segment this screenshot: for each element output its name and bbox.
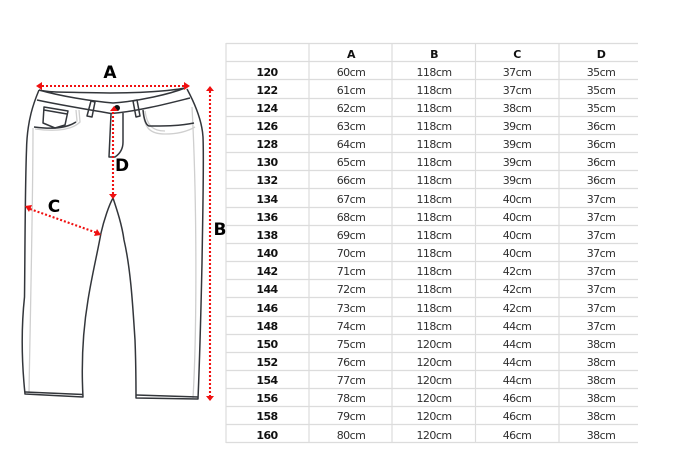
table rows: 126	[256, 120, 279, 133]
table rows: 75cm	[337, 338, 365, 351]
table rows: 69cm	[337, 229, 365, 242]
table rows: 158	[256, 410, 278, 423]
table rows: 36cm	[587, 156, 615, 169]
table rows: 67cm	[337, 193, 365, 206]
table rows: 35cm	[587, 102, 615, 115]
table rows: 120	[256, 66, 279, 79]
table rows: 66cm	[337, 174, 365, 187]
table rows: 144	[256, 283, 279, 296]
table rows: 37cm	[587, 229, 615, 242]
table rows: 118cm	[416, 174, 452, 187]
table rows: 130	[256, 156, 279, 169]
table rows: 118cm	[416, 320, 452, 333]
table rows: 46cm	[503, 429, 531, 442]
table rows: 38cm	[587, 429, 615, 442]
table rows: 118cm	[416, 156, 452, 169]
table rows: 44cm	[503, 320, 531, 333]
table rows: 70cm	[337, 247, 365, 260]
jeans diagram	[22, 63, 226, 401]
table rows: 62cm	[337, 102, 365, 115]
table rows: 37cm	[587, 302, 615, 315]
table header: B	[430, 48, 438, 61]
table rows: 120cm	[416, 410, 452, 423]
table rows: 118cm	[416, 247, 452, 260]
table rows: 146	[256, 302, 279, 315]
table rows: 44cm	[503, 356, 531, 369]
table rows: 40cm	[503, 211, 531, 224]
table rows: 122	[256, 84, 278, 97]
table rows: 76cm	[337, 356, 365, 369]
table rows: 39cm	[503, 156, 531, 169]
table rows: 118cm	[416, 66, 452, 79]
table rows	[256, 66, 615, 442]
table rows: 148	[256, 320, 278, 333]
label C: C	[48, 197, 60, 217]
table rows: 118cm	[416, 102, 452, 115]
table rows: 77cm	[337, 374, 365, 387]
table rows: 118cm	[416, 84, 452, 97]
table rows: 118cm	[416, 120, 452, 133]
table rows: 61cm	[337, 84, 365, 97]
label B: B	[214, 220, 226, 240]
table rows: 132	[256, 174, 278, 187]
table rows: 118cm	[416, 265, 452, 278]
table rows: 39cm	[503, 138, 531, 151]
table rows: 39cm	[503, 174, 531, 187]
table rows: 118cm	[416, 193, 452, 206]
arrow C	[25, 205, 101, 236]
table rows: 38cm	[587, 338, 615, 351]
table rows: 128	[256, 138, 278, 151]
table rows: 138	[256, 229, 278, 242]
table rows: 37cm	[503, 84, 531, 97]
table rows: 120cm	[416, 374, 452, 387]
table rows: 154	[256, 374, 279, 387]
table rows: 38cm	[587, 392, 615, 405]
table rows: 79cm	[337, 410, 365, 423]
table rows: 63cm	[337, 120, 365, 133]
table rows: 140	[256, 247, 279, 260]
table rows: 65cm	[337, 156, 365, 169]
table rows: 35cm	[587, 84, 615, 97]
table rows: 36cm	[587, 120, 615, 133]
table rows: 74cm	[337, 320, 365, 333]
table rows: 120cm	[416, 356, 452, 369]
arrow B	[206, 86, 214, 401]
table rows: 37cm	[587, 320, 615, 333]
table rows: 160	[256, 429, 279, 442]
table rows: 37cm	[503, 66, 531, 79]
table rows: 36cm	[587, 174, 615, 187]
table rows: 39cm	[503, 120, 531, 133]
table rows: 78cm	[337, 392, 365, 405]
table rows: 73cm	[337, 302, 365, 315]
table rows: 118cm	[416, 283, 452, 296]
table rows: 38cm	[587, 410, 615, 423]
table rows: 118cm	[416, 302, 452, 315]
icon: button	[114, 105, 120, 111]
table rows: 118cm	[416, 211, 452, 224]
label D: D	[115, 156, 129, 176]
table rows: 37cm	[587, 211, 615, 224]
table rows: 38cm	[587, 356, 615, 369]
table rows: 37cm	[587, 265, 615, 278]
table rows: 134	[256, 193, 279, 206]
table rows: 44cm	[503, 374, 531, 387]
table rows: 46cm	[503, 410, 531, 423]
table header: A	[347, 48, 356, 61]
table rows: 68cm	[337, 211, 365, 224]
table rows: 44cm	[503, 338, 531, 351]
size table	[226, 43, 638, 443]
table rows: 37cm	[587, 247, 615, 260]
table rows: 118cm	[416, 229, 452, 242]
table rows: 46cm	[503, 392, 531, 405]
jeans outline	[22, 88, 203, 399]
table rows: 124	[256, 102, 279, 115]
table rows: 150	[256, 338, 279, 351]
table rows: 142	[256, 265, 278, 278]
table rows: 60cm	[337, 66, 365, 79]
table rows: 80cm	[337, 429, 365, 442]
table rows: 42cm	[503, 302, 531, 315]
table rows: 120cm	[416, 392, 452, 405]
table rows: 38cm	[587, 374, 615, 387]
table rows: 36cm	[587, 138, 615, 151]
table rows: 38cm	[503, 102, 531, 115]
arrow A	[36, 82, 190, 90]
table rows: 72cm	[337, 283, 365, 296]
arrow D	[109, 106, 118, 199]
table rows: 40cm	[503, 193, 531, 206]
table rows: 35cm	[587, 66, 615, 79]
table rows: 37cm	[587, 193, 615, 206]
table header: D	[597, 48, 606, 61]
table rows: 118cm	[416, 138, 452, 151]
table rows: 136	[256, 211, 279, 224]
table rows: 71cm	[337, 265, 365, 278]
label A: A	[103, 63, 117, 83]
table rows: 152	[256, 356, 278, 369]
table grid	[226, 43, 638, 443]
table rows: 40cm	[503, 229, 531, 242]
table header: C	[513, 48, 521, 61]
table header	[347, 48, 606, 61]
table rows: 156	[256, 392, 279, 405]
table rows: 120cm	[416, 429, 452, 442]
table rows: 120cm	[416, 338, 452, 351]
table rows: 40cm	[503, 247, 531, 260]
table rows: 37cm	[587, 283, 615, 296]
table rows: 64cm	[337, 138, 365, 151]
table rows: 42cm	[503, 265, 531, 278]
table rows: 42cm	[503, 283, 531, 296]
